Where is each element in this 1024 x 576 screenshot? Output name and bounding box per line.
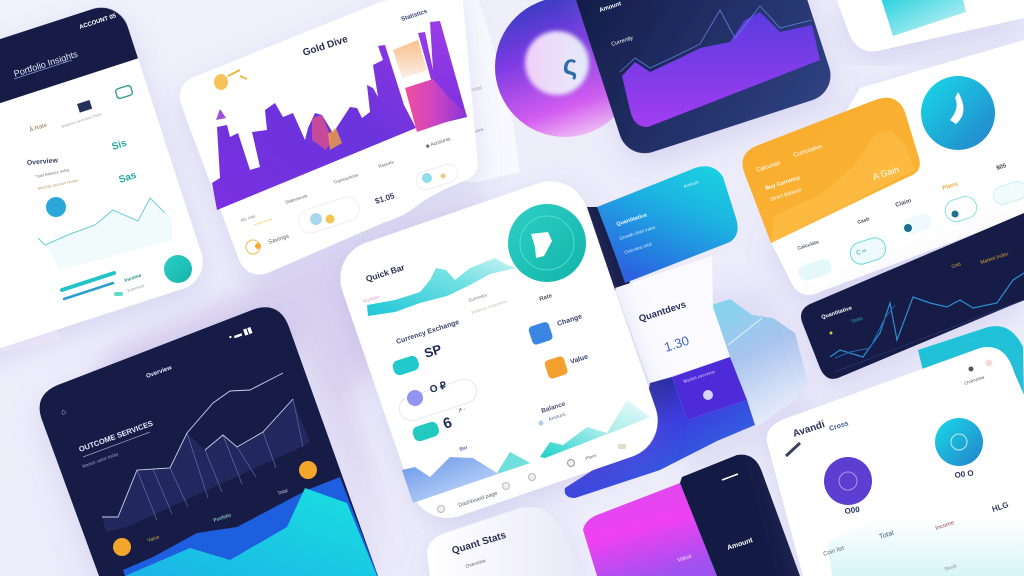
right card row items: Calculate bbox=[797, 239, 820, 252]
center card contents: SP bbox=[422, 341, 444, 361]
panel: blue gradient card: Overview total bbox=[624, 241, 652, 255]
panel: navy sliver behind blue card bbox=[587, 207, 630, 290]
panel: bottom left dark phone bbox=[40, 307, 378, 576]
panel: bottom white card: Overview bbox=[465, 558, 487, 570]
left phone contents: Sis bbox=[111, 138, 129, 153]
panel: white tile with heading: 1.30 bbox=[662, 333, 691, 355]
panel: orange card: Buy Currency bbox=[765, 175, 802, 192]
panel: purple chart card bbox=[180, 0, 478, 274]
panel: faint card far left: ⌂ bbox=[6, 222, 13, 230]
center card contents: O ₽ bbox=[429, 380, 449, 396]
center card contents: Portfolio bbox=[363, 294, 380, 304]
center card contents: 6 bbox=[441, 414, 454, 433]
bottom right card contents: Avandi bbox=[792, 419, 826, 440]
panel: orange card: A Gain bbox=[872, 164, 900, 182]
panel: center white card bbox=[330, 171, 668, 528]
panel: orange card: Direct Balance bbox=[770, 187, 803, 203]
left phone contents bbox=[13, 13, 192, 299]
dark phone contents bbox=[60, 325, 378, 576]
dark chart contents bbox=[599, 1, 820, 127]
dark phone contents: OUTCOME SERVICES bbox=[78, 419, 154, 454]
chart: bottom blue mountains bbox=[402, 452, 530, 503]
left phone contents: Å Rate bbox=[28, 121, 49, 134]
panel: right dark line chart card bbox=[801, 213, 1024, 379]
panel: faint card behind purple chart bbox=[420, 0, 520, 182]
left phone contents: ACCOUNT 05 bbox=[79, 13, 118, 31]
chart: teal area bbox=[367, 258, 516, 316]
panel: blue violet band bbox=[565, 377, 755, 498]
center card contents: Value bbox=[569, 354, 589, 366]
panel: bottom right white card bbox=[767, 347, 1024, 576]
panel: blue gradient card: Quantitative bbox=[616, 212, 648, 228]
left phone contents: Income bbox=[124, 273, 142, 284]
center card contents: Balance bbox=[540, 400, 567, 415]
left phone contents: Expenses bbox=[127, 283, 145, 293]
left phone contents: Balance overview chart bbox=[61, 111, 102, 129]
chart: pink base block bbox=[405, 79, 467, 132]
panel: orange card: Calculate bbox=[756, 160, 782, 174]
panel: top purple orb bbox=[495, 0, 635, 137]
panel: violet tile bbox=[672, 357, 747, 420]
panel: top dark chart card bbox=[566, 0, 837, 160]
bottom right card contents: Total bbox=[878, 530, 895, 541]
center card contents: Dashboard page bbox=[458, 491, 498, 509]
bottom right card contents: O00 bbox=[844, 505, 861, 516]
left phone contents: Monthly account review bbox=[37, 177, 79, 191]
panel: white tile with heading bbox=[615, 256, 730, 383]
center card contents: Plans bbox=[585, 452, 598, 461]
purple chart contents: ◉ Accounts bbox=[425, 136, 452, 150]
panel: faint card far left: ⊂⊃ bbox=[21, 290, 38, 304]
bottom right card contents: Overview bbox=[964, 375, 986, 387]
left phone contents: Portfolio Insights bbox=[13, 49, 79, 79]
panel: faint card far left bbox=[0, 170, 60, 352]
panel: faint card far left: Liro bbox=[8, 261, 21, 270]
chart: blue lines bbox=[830, 273, 1024, 357]
panel: bottom white card: Quant Stats bbox=[451, 530, 508, 557]
purple chart contents: Alo rate bbox=[240, 213, 257, 223]
center card contents: Summary bbox=[468, 292, 488, 303]
left phone contents: Total balance today bbox=[35, 167, 70, 179]
panel: magenta card bbox=[583, 483, 717, 576]
left phone contents: Overview bbox=[27, 157, 59, 167]
bottom right card contents bbox=[786, 360, 1010, 573]
dark phone contents: ⌂ bbox=[60, 407, 67, 417]
panel: white tile with heading: Quantdevs bbox=[638, 299, 688, 325]
chart: bottom blue mountain bbox=[123, 477, 378, 576]
bottom right card contents: Stock bbox=[944, 563, 958, 573]
center card contents: Rate bbox=[539, 293, 554, 303]
lavender shadow wash bbox=[70, 190, 815, 570]
center card contents: Bar bbox=[459, 445, 469, 453]
panel: violet tile: Market overview bbox=[683, 369, 716, 384]
panel: right dark line chart card: Market Index bbox=[980, 251, 1010, 266]
center card contents: Change bbox=[556, 313, 583, 328]
right card row items: C ∞ bbox=[856, 248, 867, 257]
center card contents: Currency Exchange bbox=[395, 319, 460, 346]
bottom right card contents: HLG bbox=[991, 500, 1010, 514]
panel: top right corner card bbox=[835, 0, 1024, 51]
panel: teal tile behind bottom right card bbox=[918, 326, 1024, 400]
purple chart contents: Transactions bbox=[333, 172, 359, 185]
icon: teal coin bbox=[508, 204, 586, 282]
dark phone contents: Market value today bbox=[82, 451, 120, 469]
right card row items: $05 bbox=[996, 163, 1008, 172]
panel: left phone card bbox=[0, 0, 210, 360]
dark phone contents: Value bbox=[147, 534, 161, 544]
dark chart contents: Amount bbox=[599, 1, 622, 14]
panel: bottom navy card bbox=[680, 455, 800, 576]
chart: peach block bbox=[393, 40, 427, 78]
panel: right white card bbox=[770, 40, 1024, 295]
center card contents: ↗ ∙ bbox=[457, 407, 467, 415]
bottom right card contents: Income bbox=[935, 520, 956, 532]
center card contents: Quick Bar bbox=[365, 262, 406, 284]
chart: right small mountains bbox=[540, 400, 650, 458]
panel: orange card bbox=[742, 98, 920, 243]
panel: blue gradient card: Growth chart value bbox=[619, 224, 657, 241]
panel: bottom navy card: Amount bbox=[726, 537, 754, 552]
center card contents: Balance statement bbox=[471, 298, 508, 315]
chart: line with filled area bbox=[102, 373, 310, 532]
dark phone contents: • ▬ ▮▮ bbox=[228, 325, 253, 342]
card row pill bbox=[296, 194, 362, 236]
panel: faint card behind purple chart: Overview bbox=[465, 126, 485, 137]
left phone contents: Sas bbox=[118, 170, 138, 186]
panel: right dark line chart card: Gold bbox=[951, 261, 962, 269]
right card row items: Claim bbox=[895, 198, 912, 209]
purple chart contents: Statements bbox=[285, 193, 309, 205]
panel: right dark line chart card: Stats bbox=[851, 316, 864, 325]
bottom right card contents: Cross bbox=[828, 420, 850, 433]
panel: orange card: Cumulative bbox=[793, 144, 824, 159]
panel: bottom white card bbox=[427, 507, 583, 576]
dark phone contents: Overview bbox=[146, 365, 173, 380]
dark chart contents: Currently bbox=[611, 35, 634, 48]
purple chart contents: Reports bbox=[378, 159, 395, 169]
panel: blue gradient card bbox=[597, 166, 738, 283]
center card contents bbox=[363, 204, 650, 512]
dark phone contents: Total bbox=[277, 488, 289, 497]
pale teal lower area bbox=[827, 518, 1024, 576]
purple chart contents: Savings bbox=[268, 234, 290, 246]
purple chart contents: $1.05 bbox=[374, 191, 396, 206]
panel: right dark line chart card: Quantitative bbox=[821, 305, 853, 321]
header band bbox=[0, 7, 138, 104]
right card row items: Cash bbox=[857, 216, 870, 226]
pale cyan tile bbox=[880, 0, 966, 36]
bottom right card contents: Coin list bbox=[823, 545, 845, 558]
icon: cyan coin bbox=[921, 76, 995, 150]
panel: blue gradient card: Amount bbox=[683, 179, 700, 189]
chart: bottom cyan mountain bbox=[125, 488, 377, 576]
right card row items: Plans bbox=[942, 181, 959, 192]
panel: blue mountain tile bbox=[712, 299, 808, 428]
purple chart contents bbox=[212, 9, 467, 254]
chart: purple mountains bbox=[212, 45, 416, 210]
right card row items bbox=[796, 163, 1024, 283]
chart: tall spires bbox=[418, 21, 467, 124]
center card contents: Amount bbox=[548, 412, 567, 423]
purple chart contents: Gold Dive bbox=[302, 34, 350, 59]
purple chart contents: Statistics bbox=[401, 9, 429, 23]
panel: top purple orb: ς bbox=[563, 49, 577, 80]
panel: faint card behind purple chart: Total bbox=[471, 85, 483, 94]
dark phone contents: Portfolio bbox=[213, 512, 232, 524]
panel: magenta card: Value bbox=[677, 553, 693, 564]
bottom right card contents: O0 O bbox=[954, 468, 974, 480]
